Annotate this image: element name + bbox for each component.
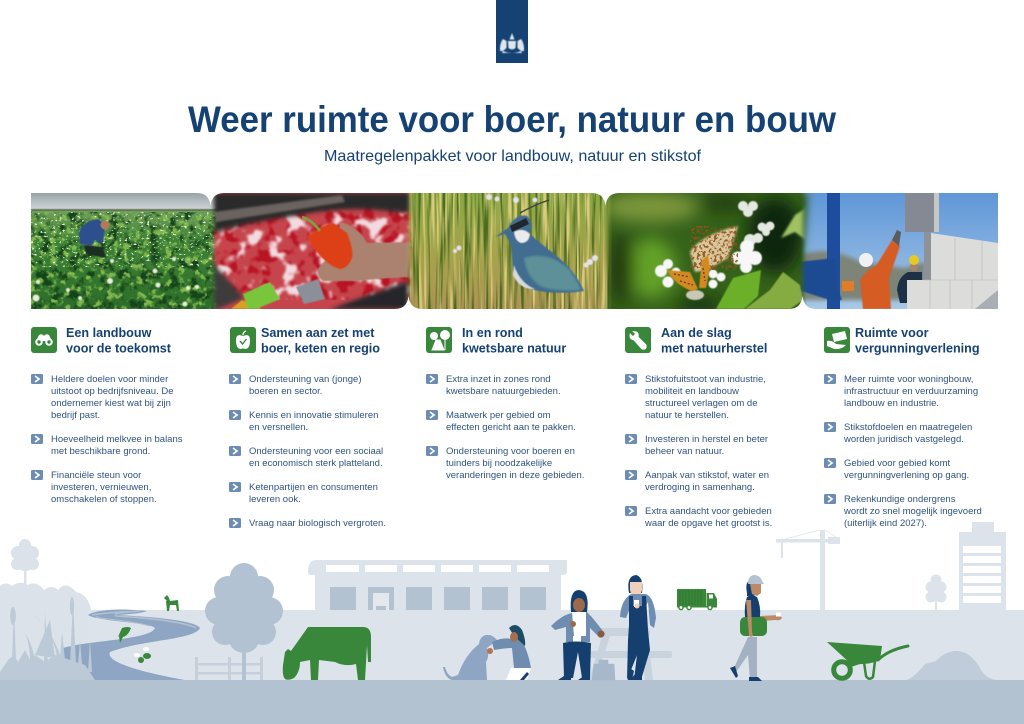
- list: Vraag naar biologisch vergroten.: [249, 518, 386, 529]
- pepper: [308, 223, 352, 269]
- ground: middle band: [88, 610, 1024, 680]
- list: uitstoot op bedrijfsniveau. De: [51, 386, 174, 397]
- crane: [776, 530, 840, 610]
- heading: vergunningverlening: [855, 342, 980, 356]
- small tree: [926, 574, 946, 610]
- farm building: [308, 560, 567, 610]
- list: Ondersteuning voor boeren en: [446, 446, 575, 457]
- deer: [164, 595, 179, 611]
- list: en versnellen.: [249, 422, 308, 433]
- list: Maatwerk per gebied om: [446, 410, 551, 421]
- heading: boer, keten en regio: [261, 342, 380, 356]
- list: Heldere doelen voor minder: [51, 374, 168, 385]
- column 4: Aan de slag met natuurherstel: [625, 326, 772, 529]
- list: infrastructuur en verduurzaming: [844, 386, 978, 397]
- bench: [589, 628, 672, 680]
- butterfly: [134, 647, 151, 663]
- list: kwetsbare natuurgebieden.: [446, 386, 561, 397]
- column 1: Een landbouw voor de toekomst: [31, 326, 183, 505]
- list: structureel verlagen om de: [645, 398, 757, 409]
- seated woman: [551, 590, 605, 680]
- heading: In en rond: [462, 326, 523, 340]
- heading: voor de toekomst: [66, 342, 172, 356]
- crouching girl: [487, 625, 531, 680]
- list: ondernemer kiest wat bij zijn: [51, 398, 171, 409]
- list: Gebied voor gebied komt: [844, 458, 951, 469]
- photo: lapwing bird in grass: [395, 193, 620, 309]
- subtitle: Maatregelenpakket voor landbouw, natuur en stikstof: [324, 148, 702, 165]
- list: leveren ook.: [249, 494, 301, 505]
- list: Rekenkundige ondergrens: [844, 494, 956, 505]
- list: met beschikbare grond.: [51, 446, 150, 457]
- icon: coat of arms: [500, 33, 524, 53]
- wheelbarrow: [827, 642, 908, 679]
- photo: hand holding red pepper in supermarket: [200, 193, 425, 309]
- list: [426, 374, 584, 481]
- heading: met natuurherstel: [661, 342, 767, 356]
- heading: Samen aan zet met: [261, 326, 375, 340]
- list: tuinders bij noodzakelijke: [446, 458, 552, 469]
- list: waar de opgave het grootst is.: [644, 518, 772, 529]
- big tree: [205, 563, 283, 680]
- photo: construction workers building a wall: [800, 193, 998, 309]
- list: investeren, vernieuwen,: [51, 482, 151, 493]
- list: Kennis en innovatie stimuleren: [249, 410, 378, 421]
- ground: front band: [0, 680, 1024, 724]
- apartment tower: [959, 522, 1006, 610]
- list: Ondersteuning van (jonge): [249, 374, 362, 385]
- list: Extra aandacht voor gebieden: [645, 506, 772, 517]
- fence: [195, 657, 263, 680]
- list: omschakelen of stoppen.: [51, 494, 157, 505]
- truck: [677, 589, 717, 610]
- list: Investeren in herstel en beter: [645, 434, 768, 445]
- list: landbouw en industrie.: [844, 398, 939, 409]
- dog: [443, 635, 497, 680]
- list: Ketenpartijen en consumenten: [249, 482, 378, 493]
- list: veranderingen in deze gebieden.: [446, 470, 584, 481]
- hand: [318, 222, 410, 281]
- icon: binoculars: [31, 327, 57, 353]
- photo strip: [31, 192, 1005, 313]
- list: vergunningverlening op gang.: [844, 470, 969, 481]
- icon: permit in hand: [824, 327, 850, 353]
- list: Stikstofuitstoot van industrie,: [645, 374, 766, 385]
- list: verdroging in samenhang.: [645, 482, 755, 493]
- list: [824, 374, 982, 529]
- logo: Rijksoverheid ribbon: [496, 0, 528, 63]
- landscape illustration: [0, 522, 1024, 724]
- background trees and shrubs: [0, 539, 91, 680]
- list: Extra inzet in zones rond: [446, 374, 551, 385]
- column 2: Samen aan zet met boer, keten en regio: [229, 326, 386, 529]
- list: wordt zo snel mogelijk ingevoerd: [843, 506, 982, 517]
- notches between photos: [197, 193, 816, 309]
- list: effecten gericht aan te pakken.: [446, 422, 576, 433]
- photo: butterfly on white blossom: [604, 193, 807, 309]
- heading: Ruimte voor: [855, 326, 929, 340]
- river: [63, 610, 200, 680]
- sand piles: [905, 651, 999, 680]
- list: (uiterlijk eind 2027).: [844, 518, 927, 529]
- list: Aanpak van stikstof, water en: [645, 470, 769, 481]
- photo: farmer in potato field: [31, 193, 226, 309]
- heading: Aan de slag: [661, 326, 732, 340]
- list: boeren en sector.: [249, 386, 322, 397]
- list: [625, 374, 772, 529]
- column 3: In en rond kwetsbare natuur: [426, 326, 584, 481]
- standing man in overalls: [620, 575, 656, 680]
- list: [31, 374, 183, 505]
- list: [229, 374, 386, 529]
- column 5: Ruimte voor vergunningverlening: [824, 326, 982, 529]
- icon: wrench: [625, 327, 651, 353]
- icon: apple with check: [230, 327, 256, 353]
- list: natuur te herstellen.: [645, 410, 729, 421]
- list: en economisch sterk platteland.: [249, 458, 383, 469]
- title: Weer ruimte voor boer, natuur en bouw: [188, 99, 836, 140]
- reeds: [0, 597, 95, 680]
- heading: Een landbouw: [66, 326, 152, 340]
- list: Financiële steun voor: [51, 470, 141, 481]
- cow: [283, 627, 371, 680]
- list: beheer van natuur.: [645, 446, 724, 457]
- list: Hoeveelheid melkvee in balans: [51, 434, 183, 445]
- walking worker with bag: [730, 575, 782, 681]
- heading: kwetsbare natuur: [462, 342, 566, 356]
- icon: road and trees: [426, 327, 452, 353]
- list: Ondersteuning voor een sociaal: [249, 446, 383, 457]
- list: Stikstofdoelen en maatregelen: [844, 422, 972, 433]
- list: Meer ruimte voor woningbouw,: [844, 374, 973, 385]
- list: bedrijf past.: [51, 410, 100, 421]
- list: mobiliteit en landbouw: [645, 386, 739, 397]
- fish: [118, 627, 131, 643]
- list: worden juridisch vastgelegd.: [843, 434, 964, 445]
- bag: [592, 660, 615, 680]
